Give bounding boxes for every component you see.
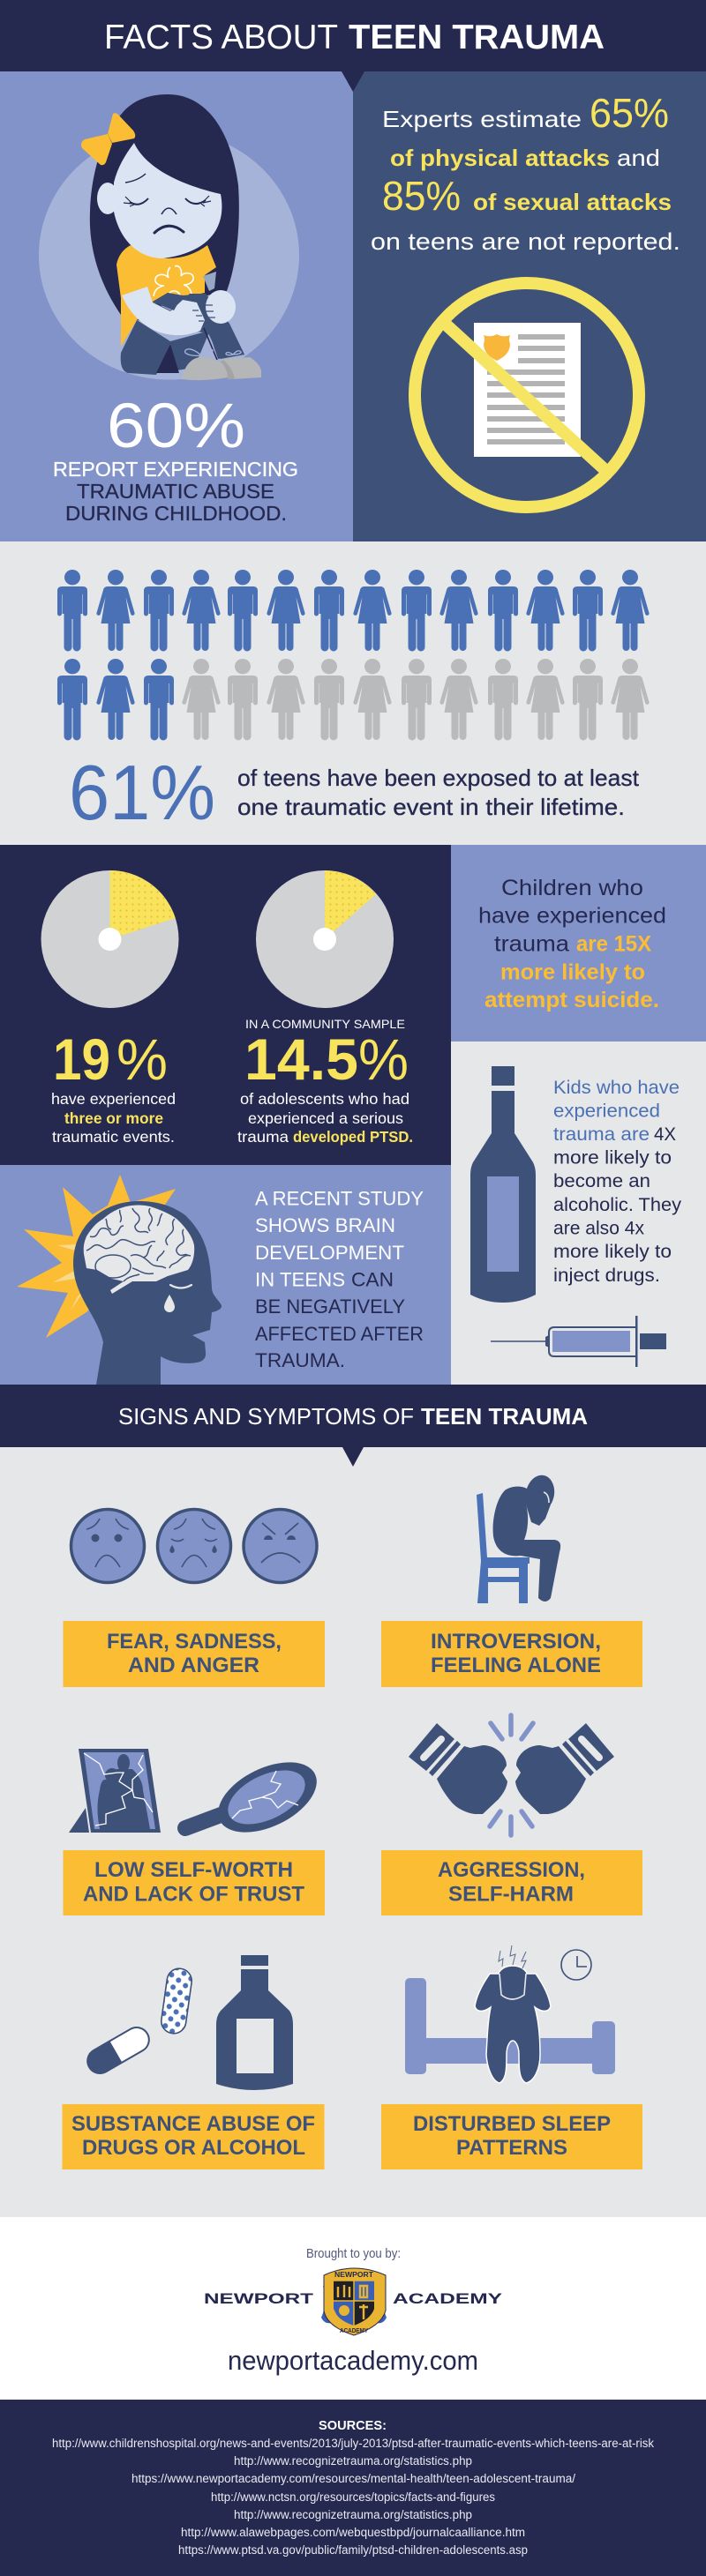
symptom: substance abuse <box>62 1955 325 2169</box>
text: experts estimate: 65% <box>590 90 669 136</box>
label: low self-worth: LOW SELF-WORTH <box>94 1858 293 1882</box>
label: aggression: SELF-HARM <box>448 1882 574 1907</box>
panel: suicide risk: attempt suicide. <box>484 988 659 1012</box>
text: recent study: SHOWS BRAIN <box>255 1214 395 1236</box>
title: FACTS ABOUT <box>104 19 338 56</box>
caption: traumatic abuse <box>53 458 298 525</box>
text: recent study: CAN <box>351 1268 394 1291</box>
section header: signs and symptoms: TEEN TRAUMA <box>421 1403 588 1430</box>
text: experts estimate: and <box>617 145 660 171</box>
caption: developed PTSD <box>237 1090 413 1146</box>
text: kids who have experienced trauma: are also 4x <box>553 1217 644 1238</box>
caption: exposed to trauma: one traumatic event in their lifetime. <box>237 794 625 820</box>
pictogram: 61 percent of people <box>57 570 650 836</box>
label: disturbed sleep: PATTERNS <box>456 2136 567 2160</box>
text: experts estimate: of sexual attacks <box>473 189 672 215</box>
list: source urls <box>52 2437 654 2557</box>
label: fear sadness anger <box>64 1621 325 1687</box>
panel: suicide risk <box>451 845 706 1042</box>
section header: signs and symptoms: SIGNS AND SYMPTOMS OF <box>118 1403 414 1430</box>
text: experts estimate: on teens are not reported. <box>371 228 680 255</box>
caption: developed PTSD: developed PTSD. <box>293 1128 413 1146</box>
list: source urls: http://www.alawebpages.com/webquestbpd/journalcaalliance.htm <box>181 2526 525 2539</box>
icon: syringe <box>491 1316 666 1367</box>
caption: developed PTSD: trauma <box>237 1128 289 1146</box>
text: experts estimate: of physical attacks <box>390 145 610 171</box>
caption: three or more: have experienced <box>51 1090 176 1108</box>
text: recent study: BE NEGATIVELY <box>255 1295 405 1318</box>
text: kids who have experienced trauma: trauma are <box>553 1124 650 1145</box>
caption: traumatic abuse: TRAUMATIC ABUSE <box>77 480 274 503</box>
caption: three or more <box>51 1090 176 1146</box>
text: kids who have experienced trauma: become an <box>553 1170 650 1191</box>
text: kids who have experienced trauma <box>553 1077 681 1286</box>
list: source urls: https://www.ptsd.va.gov/public/family/ptsd-children-adolescents.asp <box>178 2543 528 2557</box>
text: recent study: DEVELOPMENT <box>255 1242 404 1264</box>
symptom: aggression <box>381 1715 642 1915</box>
logo: newport academy: NEWPORT <box>204 2290 314 2307</box>
text: kids who have experienced trauma: 4X <box>654 1124 676 1145</box>
caption: exposed to trauma: of teens have been exposed to at least <box>237 765 640 791</box>
icon: police report document <box>474 323 581 457</box>
symptom: low self-worth <box>64 1748 327 1915</box>
symptom: disturbed sleep <box>381 1945 642 2169</box>
stat: 14.5 percent: % <box>358 1027 409 1092</box>
text: kids who have experienced trauma: experienced <box>553 1101 660 1122</box>
icon: person on bed with clock <box>405 1945 615 2083</box>
label: disturbed sleep: DISTURBED SLEEP <box>413 2112 611 2136</box>
logo: newport academy <box>204 2268 503 2335</box>
people row 2 <box>57 659 650 741</box>
text: experts estimate: 85% <box>382 173 461 219</box>
label: fear sadness anger: AND ANGER <box>128 1654 259 1677</box>
panel: alcohol and drugs <box>451 1042 706 1385</box>
panel: suicide risk: trauma <box>494 931 569 956</box>
text: recent study: A RECENT STUDY <box>255 1187 424 1210</box>
caption: three or more: traumatic events. <box>52 1128 175 1146</box>
label: low self-worth: AND LACK OF TRUST <box>83 1882 304 1907</box>
icon: boxing gloves <box>409 1715 614 1835</box>
title <box>104 19 605 56</box>
label: aggression <box>381 1850 642 1915</box>
icon: person on chair <box>477 1475 560 1603</box>
icon: prohibited sign <box>415 283 639 507</box>
text: kids who have experienced trauma: alcoholic. They <box>553 1194 681 1215</box>
footer: sponsor <box>204 2247 503 2376</box>
caption: traumatic abuse: REPORT EXPERIENCING <box>53 458 298 481</box>
icon: three faces <box>71 1510 317 1582</box>
symptom: introversion <box>381 1475 642 1687</box>
triangle pointer and header <box>0 0 706 92</box>
pie chart: 14.5 percent <box>256 870 394 1008</box>
panel: suicide risk: Children who <box>501 876 643 900</box>
label: fear sadness anger: FEAR, SADNESS, <box>107 1630 282 1654</box>
pie chart: 19 percent <box>41 870 178 1008</box>
list: source urls: https://www.newportacademy.com/resources/mental-health/teen-adolescent-trauma/ <box>131 2472 575 2485</box>
panel: suicide risk: are 15X <box>576 931 651 956</box>
caption: developed PTSD: experienced a serious <box>248 1109 403 1127</box>
icon: pills and bottle <box>83 1955 293 2090</box>
panel: sources <box>0 2400 706 2576</box>
title: TEEN TRAUMA <box>349 19 605 56</box>
logo: newport academy: ACADEMY <box>393 2290 503 2307</box>
label: substance abuse: SUBSTANCE ABUSE OF <box>71 2112 315 2136</box>
caption: developed PTSD: of adolescents who had <box>240 1090 409 1108</box>
text: recent study: AFFECTED AFTER <box>255 1323 424 1345</box>
text: recent study <box>255 1187 424 1371</box>
stat: 19 percent: % <box>116 1027 168 1092</box>
caption: exposed to trauma <box>237 765 640 820</box>
stat: 14.5 percent <box>244 1027 409 1092</box>
logo: newport academy: ACADEMY <box>340 2328 368 2334</box>
people row 1 <box>57 570 650 651</box>
label: substance abuse: DRUGS OR ALCOHOL <box>82 2136 305 2160</box>
stat: 14.5 percent: 14.5 <box>244 1027 358 1092</box>
text: recent study: TRAUMA. <box>255 1349 345 1371</box>
label: introversion <box>381 1621 642 1687</box>
caption: three or more: three or more <box>64 1109 163 1127</box>
list: source urls: http://www.nctsn.org/resources/topics/facts-and-figures <box>211 2490 495 2504</box>
label: substance abuse <box>62 2104 325 2169</box>
panel: suicide risk: have experienced <box>478 903 666 928</box>
icon: broken mirrors <box>69 1748 327 1847</box>
label: introversion: INTROVERSION, <box>431 1630 601 1654</box>
heading: sources: SOURCES: <box>319 2418 387 2433</box>
text: experts estimate <box>371 90 680 255</box>
panel: suicide risk: more likely to <box>500 959 645 984</box>
label: community sample: IN A COMMUNITY SAMPLE <box>245 1017 405 1031</box>
label: low self-worth <box>64 1850 325 1915</box>
text: website: newportacademy.com <box>228 2345 478 2376</box>
symptom: fear sadness anger <box>64 1510 325 1687</box>
caption: traumatic abuse: DURING CHILDHOOD. <box>65 502 287 525</box>
label: disturbed sleep <box>381 2104 642 2169</box>
section header: signs and symptoms <box>0 1385 706 1467</box>
text: brought to you by: Brought to you by: <box>306 2247 401 2261</box>
panel: girl 60 percent <box>0 71 353 541</box>
text: kids who have experienced trauma: more likely to <box>553 1146 672 1168</box>
label: introversion: FEELING ALONE <box>431 1654 601 1677</box>
list: source urls: http://www.recognizetrauma.org/statistics.php <box>234 2454 472 2468</box>
stat: 19 percent: 19 <box>53 1027 110 1092</box>
panel: brain development <box>0 1165 451 1385</box>
stat: 61 percent: 61% <box>69 749 215 836</box>
text: kids who have experienced trauma: more likely to <box>553 1241 672 1262</box>
text: recent study: IN TEENS <box>255 1268 345 1291</box>
icon: head with brain and burst <box>17 1175 222 1385</box>
panel: pie statistics <box>0 845 451 1165</box>
illustration: sad girl <box>39 94 299 380</box>
text: kids who have experienced trauma: inject drugs. <box>553 1265 660 1286</box>
text: experts estimate: Experts estimate <box>382 106 582 132</box>
stat: 60 percent: 60% <box>107 392 245 461</box>
list: source urls: http://www.childrenshospital.org/news-and-events/2013/july-2013/ptsd-after-traumatic-events-which-teens-are-at-risk <box>52 2437 654 2450</box>
label: aggression: AGGRESSION, <box>438 1858 585 1882</box>
panel: not reported <box>353 71 706 541</box>
list: source urls: http://www.recognizetrauma.org/statistics.php <box>234 2508 472 2521</box>
stat: 19 percent <box>53 1027 168 1092</box>
text: kids who have experienced trauma: Kids who have <box>553 1077 680 1098</box>
logo: newport academy: NEWPORT <box>334 2271 373 2279</box>
icon: bottle <box>470 1066 536 1303</box>
